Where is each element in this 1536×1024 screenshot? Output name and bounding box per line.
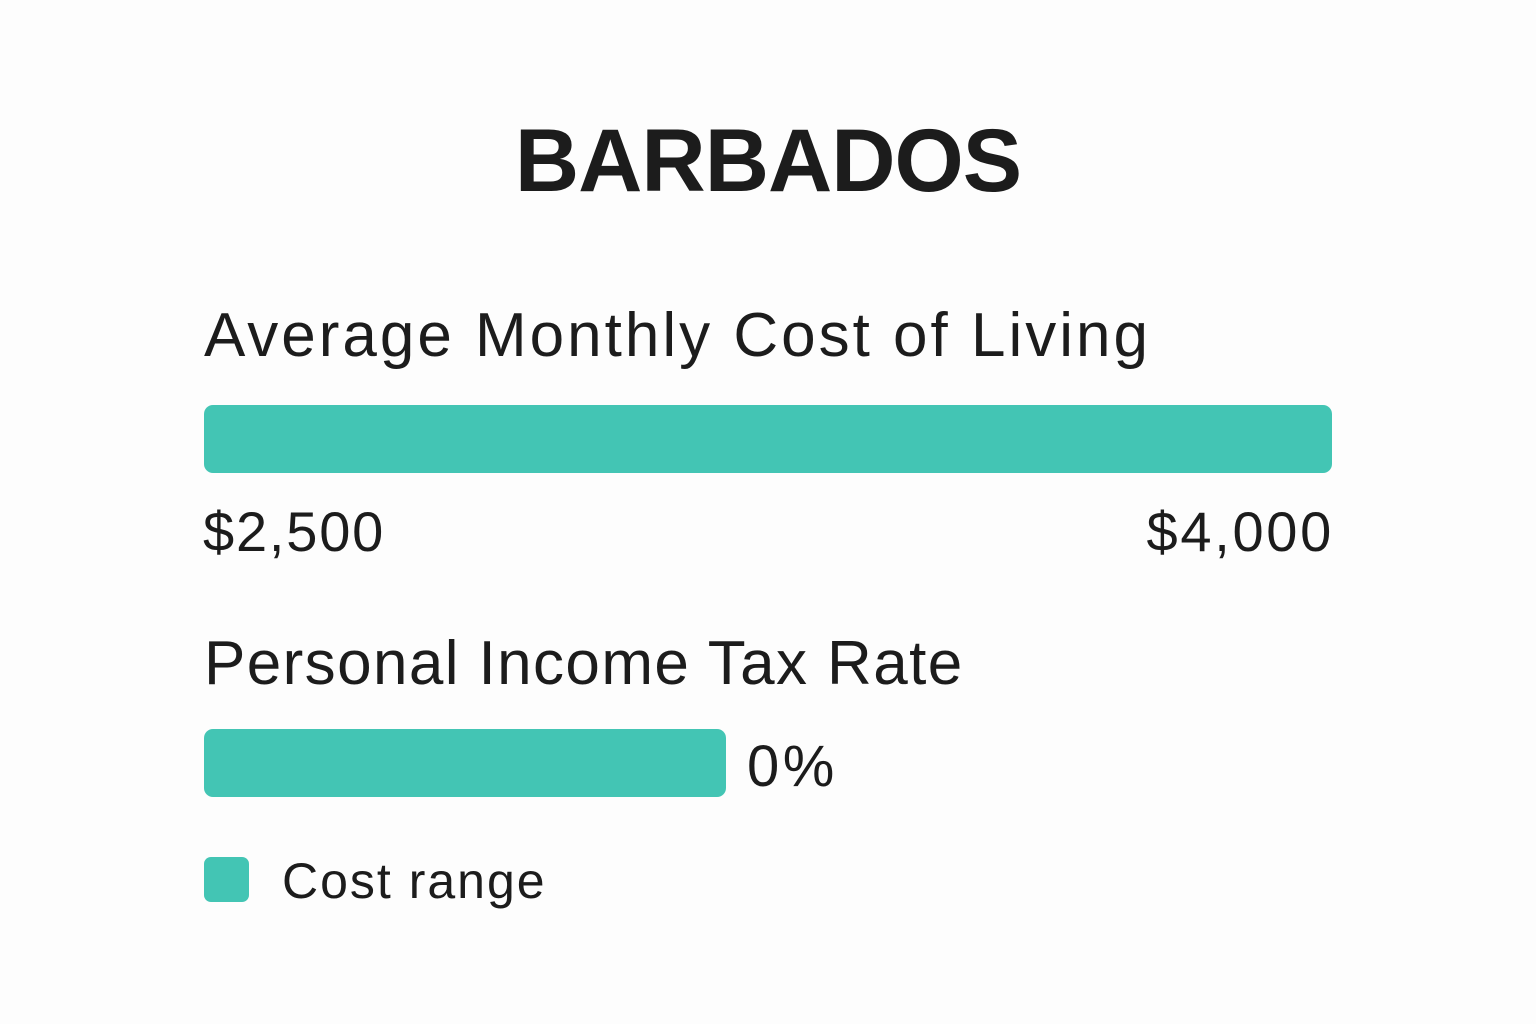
bar: cost range [204,405,1332,473]
legend swatch [204,857,249,902]
heading: cost of living: Average Monthly Cost of Living [204,301,1151,370]
legend text: Cost range [282,853,547,909]
label: min cost: $2,500 [203,500,385,563]
label: max cost: $4,000 [1147,500,1334,563]
title: BARBADOS [515,110,1021,210]
label: tax value: 0% [747,734,838,799]
bar: tax [204,729,726,797]
legend [204,853,547,909]
heading: income tax: Personal Income Tax Rate [204,629,964,698]
